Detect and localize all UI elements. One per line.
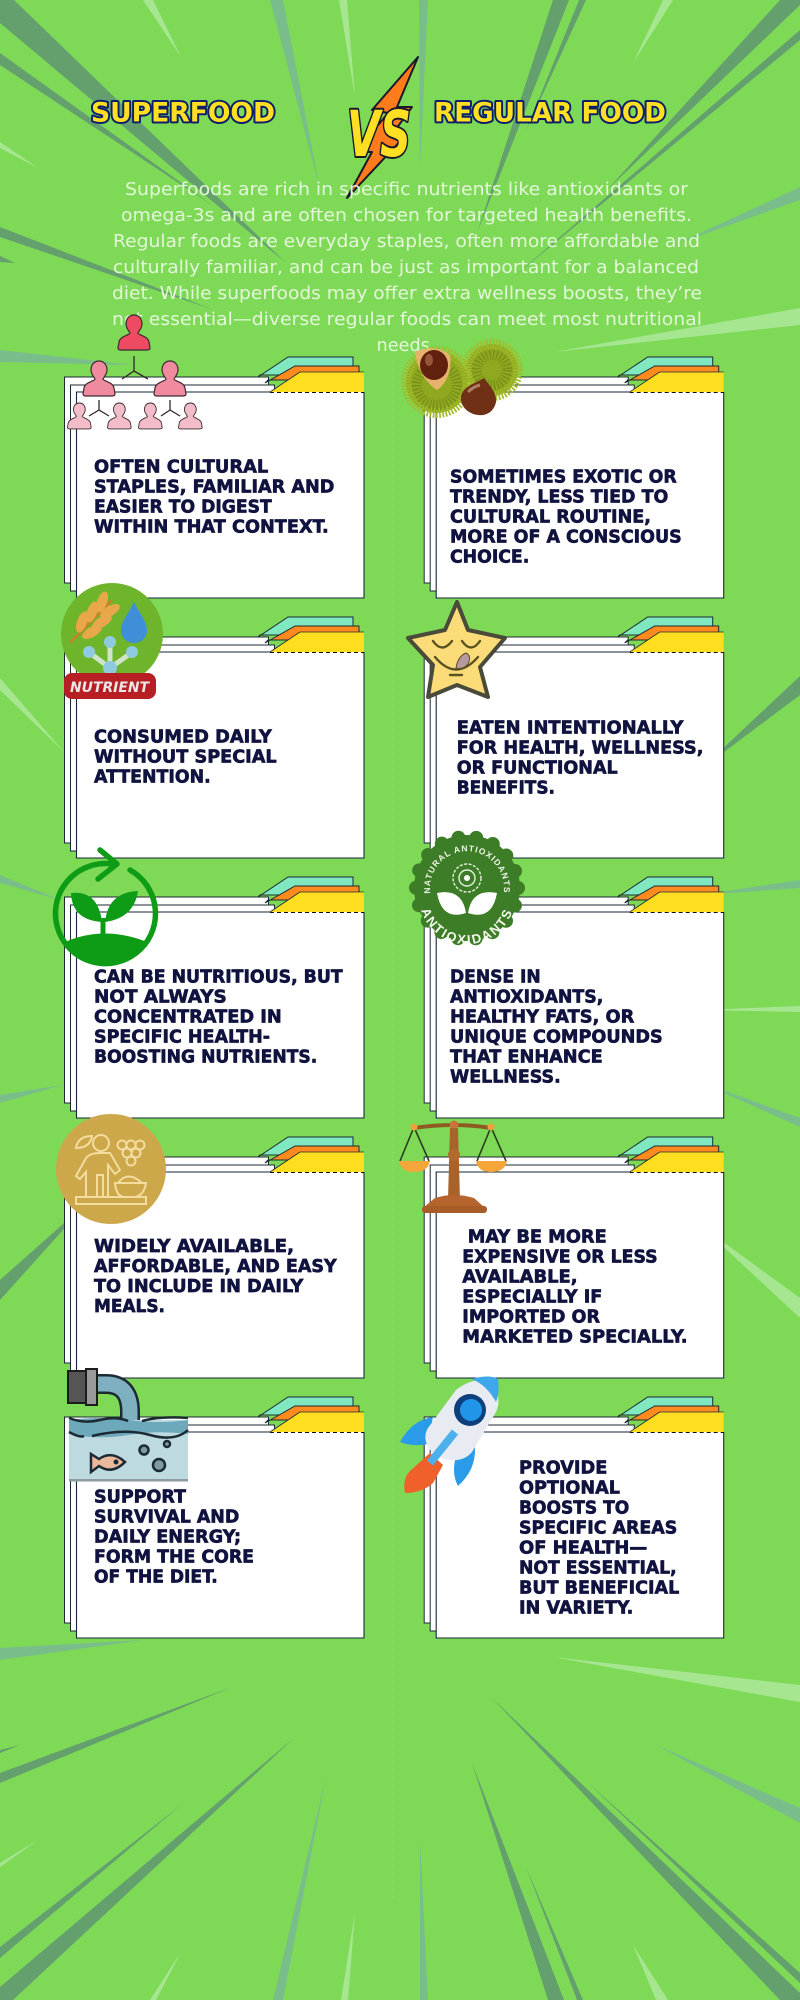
icon: antioxidants seal: NATURAL ANTIOXIDANTS — [424, 845, 510, 894]
panel: superfood 3 — [409, 830, 724, 1118]
text: SURVIVAL AND — [94, 1506, 239, 1527]
icon: nutrient badge: NUTRIENT — [70, 680, 150, 696]
text: OPTIONAL — [519, 1477, 620, 1498]
heading: superfood: SUPERFOOD — [91, 98, 275, 128]
text — [450, 467, 682, 568]
text — [94, 727, 277, 788]
text: SOMETIMES EXOTIC OR — [450, 467, 677, 488]
text — [94, 1236, 338, 1317]
text: MAY BE MORE — [468, 1226, 607, 1247]
text: BOOSTS TO — [519, 1497, 629, 1518]
text: SPECIFIC AREAS — [519, 1517, 677, 1538]
text: IMPORTED OR — [462, 1306, 600, 1327]
text: MORE OF A CONSCIOUS — [450, 527, 682, 548]
text — [450, 967, 663, 1088]
text: WIDELY AVAILABLE, — [94, 1236, 294, 1257]
text: WITHOUT SPECIAL — [94, 747, 277, 768]
panel: regular food 4 — [56, 1114, 364, 1378]
text: NOT ESSENTIAL, — [519, 1557, 677, 1578]
intro text: not essential—diverse regular foods can meet most nutritional — [112, 309, 702, 330]
text: CONSUMED DAILY — [94, 727, 273, 748]
text: SUPPORT — [94, 1486, 187, 1507]
panel: regular food 3 — [55, 850, 364, 1118]
text: BUT BENEFICIAL — [519, 1577, 679, 1598]
text: WELLNESS. — [450, 1067, 561, 1088]
text: ATTENTION. — [94, 767, 211, 788]
text: BOOSTING NUTRIENTS. — [94, 1046, 317, 1067]
text — [519, 1457, 679, 1618]
icon: person with food — [56, 1114, 166, 1224]
text: DAILY ENERGY; — [94, 1526, 241, 1547]
text: OF HEALTH— — [519, 1537, 647, 1558]
icon: family tree — [68, 315, 202, 429]
intro text: needs. — [376, 335, 436, 356]
icon: nutrient badge — [61, 583, 163, 699]
panel: regular food 1 — [64, 315, 364, 598]
text: FORM THE CORE — [94, 1546, 254, 1567]
text — [94, 1486, 254, 1587]
icon: antioxidants seal: ANTIOXIDANTS — [421, 910, 512, 944]
text: EASIER TO DIGEST — [94, 497, 272, 518]
text: THAT ENHANCE — [450, 1047, 603, 1068]
text: OFTEN CULTURAL — [94, 457, 268, 478]
text: UNIQUE COMPOUNDS — [450, 1027, 663, 1048]
icon: chestnuts — [406, 344, 518, 415]
text — [457, 717, 703, 798]
text: TO INCLUDE IN DAILY — [94, 1276, 304, 1297]
heading: regular food: REGULAR FOOD — [434, 98, 666, 128]
text: IN VARIETY. — [519, 1597, 633, 1618]
icon: antioxidants seal — [409, 830, 525, 946]
intro text: Superfoods are rich in specific nutrients like antioxidants or — [125, 179, 689, 200]
panel: superfood 2 — [408, 602, 724, 858]
text: CULTURAL ROUTINE, — [450, 507, 651, 528]
text: ANTIOXIDANTS, — [450, 987, 603, 1008]
panel: superfood 5 — [400, 1376, 724, 1638]
intro text: culturally familiar, and can be just as important for a balanced — [113, 257, 699, 278]
text: NOT ALWAYS — [94, 986, 227, 1007]
icon: balance scale — [399, 1120, 507, 1213]
panel: regular food 2 — [61, 583, 364, 858]
intro text: omega-3s and are often chosen for targeted health benefits. — [121, 205, 692, 226]
text: DENSE IN — [450, 967, 541, 988]
text: OF THE DIET. — [94, 1566, 218, 1587]
panel: superfood 1 — [406, 344, 724, 598]
text: EATEN INTENTIONALLY — [457, 717, 684, 738]
text — [94, 966, 343, 1067]
intro text: diet. While superfoods may offer extra wellness boosts, they’re — [112, 283, 702, 304]
text: MEALS. — [94, 1296, 165, 1317]
icon: vs lightning bolt — [347, 57, 418, 198]
text: OR FUNCTIONAL — [457, 757, 618, 778]
text: CHOICE. — [450, 547, 529, 568]
intro text: Regular foods are everyday staples, often more affordable and — [113, 231, 700, 252]
text: STAPLES, FAMILIAR AND — [94, 477, 334, 498]
icon: star face — [408, 602, 505, 697]
text: PROVIDE — [519, 1457, 607, 1478]
text — [462, 1226, 688, 1347]
panel: superfood 4 — [399, 1120, 724, 1378]
text — [94, 457, 334, 538]
icon: sprout cycle — [55, 850, 155, 964]
text: HEALTHY FATS, OR — [450, 1007, 634, 1028]
icon: rocket — [400, 1376, 499, 1493]
text: MARKETED SPECIALLY. — [462, 1326, 688, 1347]
text: SPECIFIC HEALTH- — [94, 1026, 270, 1047]
text: BENEFITS. — [457, 777, 555, 798]
text: AFFORDABLE, AND EASY — [94, 1256, 338, 1277]
text: AVAILABLE, — [462, 1266, 578, 1287]
icon: vs lightning bolt: VS — [347, 98, 411, 171]
text: CONCENTRATED IN — [94, 1006, 282, 1027]
icon: pipe and water — [68, 1369, 188, 1482]
intro text — [112, 179, 702, 356]
text: EXPENSIVE OR LESS — [462, 1246, 658, 1267]
text: WITHIN THAT CONTEXT. — [94, 517, 329, 538]
text: TRENDY, LESS TIED TO — [450, 487, 668, 508]
text: FOR HEALTH, WELLNESS, — [457, 737, 703, 758]
panel: regular food 5 — [64, 1369, 364, 1638]
text: ESPECIALLY IF — [462, 1286, 602, 1307]
text: CAN BE NUTRITIOUS, BUT — [94, 966, 343, 987]
